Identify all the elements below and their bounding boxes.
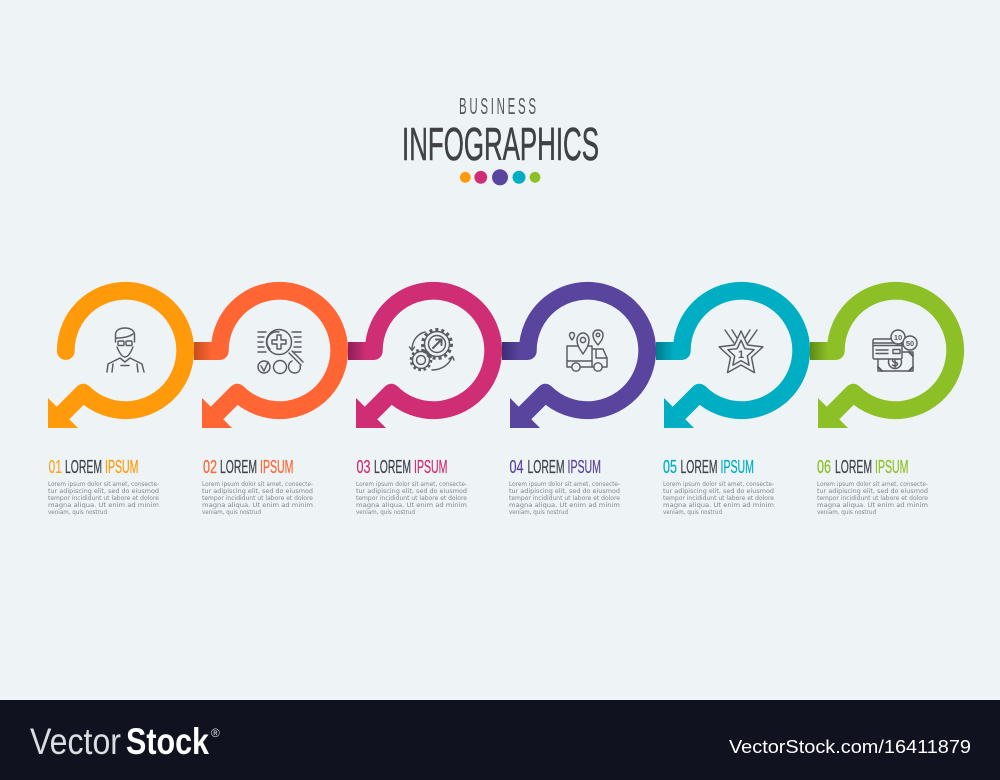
text block 01: magna aliqua. Ut enim ad minim [48, 503, 159, 509]
text block 03: tempor incididunt ut labore et dolore [356, 496, 467, 502]
connector 04 [502, 342, 528, 360]
text block 03: tur adipiscing elit, sed do eiusmod [356, 489, 467, 495]
text block 02: Lorem ipsum dolor sit amet, consecte- [202, 482, 313, 488]
footer logo: Stock [126, 721, 209, 762]
star number: 1 [738, 349, 744, 361]
footer logo: ® [211, 726, 220, 740]
label 01: LOREM [65, 456, 102, 477]
text block 03: magna aliqua. Ut enim ad minim [356, 503, 467, 509]
text block 04: tempor incididunt ut labore et dolore [509, 496, 620, 502]
text block 06: tur adipiscing elit, sed do eiusmod [817, 489, 928, 495]
label 02: 02 [203, 456, 217, 477]
icon: card, banknote and coins [873, 330, 917, 371]
text block 02: magna aliqua. Ut enim ad minim [202, 503, 313, 509]
text block 06 [817, 482, 928, 516]
text block 02 [202, 482, 313, 516]
text block 02: tur adipiscing elit, sed do eiusmod [202, 489, 313, 495]
label 04: IPSUM [568, 456, 601, 477]
label 06: LOREM [835, 456, 872, 477]
text block 05: magna aliqua. Ut enim ad minim [663, 503, 774, 509]
text block 01 [48, 482, 159, 516]
text block 02: veniam, quis nostrud [202, 510, 261, 516]
footer image id: VectorStock.com/16411879 [729, 737, 971, 757]
text block 04 [509, 482, 620, 516]
panel: step 03 [348, 291, 493, 516]
ring arrow 01 [48, 291, 185, 428]
connector 03 [348, 342, 374, 360]
ring arrow 02 [202, 291, 339, 428]
text block 05: Lorem ipsum dolor sit amet, consecte- [663, 482, 774, 488]
label 02: IPSUM [260, 456, 294, 477]
text block 06: tempor incididunt ut labore et dolore [817, 496, 928, 502]
label 04: LOREM [528, 456, 564, 477]
text block 04: tur adipiscing elit, sed do eiusmod [509, 489, 620, 495]
text block 05: tempor incididunt ut labore et dolore [663, 496, 774, 502]
text block 05: tur adipiscing elit, sed do eiusmod [663, 489, 774, 495]
ring arrow 06 [818, 291, 955, 428]
panel: step 01 [48, 291, 185, 516]
panel: step 02 [194, 291, 339, 516]
ring arrow 05 [664, 291, 801, 428]
text block 03 [356, 482, 467, 516]
label 06: 06 [817, 456, 831, 477]
footer logo [30, 721, 220, 762]
text block 04: magna aliqua. Ut enim ad minim [509, 503, 620, 509]
coin values: 50 [906, 339, 914, 348]
heading: infographics: INFOGRAPHICS [402, 118, 599, 170]
text block 04: veniam, quis nostrud [509, 510, 568, 516]
connector 02 [194, 342, 220, 360]
text block 05: veniam, quis nostrud [663, 510, 722, 516]
label 04: 04 [510, 456, 524, 477]
coloured dots [460, 169, 540, 185]
connector 05 [656, 342, 682, 360]
label 06: IPSUM [875, 456, 908, 477]
text block 03: veniam, quis nostrud [356, 510, 415, 516]
label 05: IPSUM [720, 456, 754, 477]
text block 02: tempor incididunt ut labore et dolore [202, 496, 313, 502]
panel: step 05 [656, 291, 801, 516]
icon: delivery truck with pins [567, 330, 607, 371]
label 01: 01 [48, 456, 62, 477]
icon: gears with arrow [410, 330, 454, 370]
text block 01: tempor incididunt ut labore et dolore [48, 496, 159, 502]
title block [402, 94, 599, 185]
label 03: 03 [356, 456, 370, 477]
label 02: LOREM [220, 456, 257, 477]
footer bar [0, 700, 1000, 780]
panel: step 06 [810, 291, 955, 516]
label 05: 05 [663, 456, 677, 477]
ring arrow 04 [510, 291, 647, 428]
icon: magnifier with checks [258, 330, 303, 374]
label 05: LOREM [680, 456, 718, 477]
text block 05 [663, 482, 774, 516]
icon: person with glasses [107, 328, 144, 372]
text block 01: veniam, quis nostrud [48, 510, 107, 516]
icon: star badge [719, 330, 763, 373]
label 03: IPSUM [414, 456, 448, 477]
heading: business: BUSINESS [459, 94, 539, 119]
panel: step 04 [502, 291, 647, 516]
text block 03: Lorem ipsum dolor sit amet, consecte- [356, 482, 467, 488]
connector 06 [810, 342, 836, 360]
footer logo: Vector [30, 721, 121, 762]
text block 06: magna aliqua. Ut enim ad minim [817, 503, 928, 509]
label 03: LOREM [374, 456, 411, 477]
text block 06: Lorem ipsum dolor sit amet, consecte- [817, 482, 928, 488]
text block 04: Lorem ipsum dolor sit amet, consecte- [509, 482, 620, 488]
coin values: 10 [894, 333, 902, 342]
text block 01: tur adipiscing elit, sed do eiusmod [48, 489, 159, 495]
label 01: IPSUM [105, 456, 138, 477]
text block 01: Lorem ipsum dolor sit amet, consecte- [48, 482, 159, 488]
coin values [894, 333, 914, 348]
ring arrow 03 [356, 291, 493, 428]
text block 06: veniam, quis nostrud [817, 510, 876, 516]
